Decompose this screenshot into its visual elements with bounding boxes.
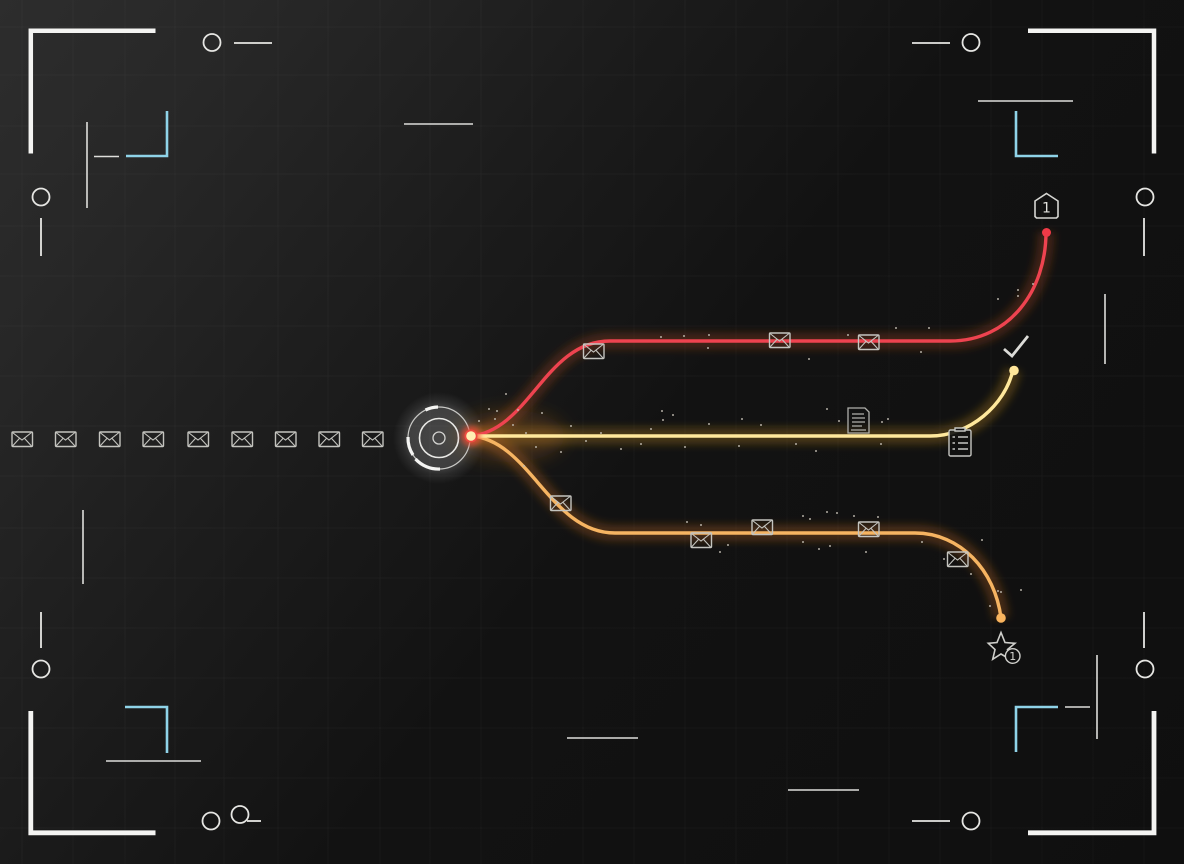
envelope 3 xyxy=(100,432,120,446)
marker: circle and tick top right xyxy=(912,34,980,51)
route: orange branch to bottom xyxy=(471,436,1001,618)
envelope 5 xyxy=(188,432,208,446)
envelope 6 xyxy=(232,432,252,446)
marker: circle and tick bottom right xyxy=(912,812,980,830)
marker: circle and tick top left xyxy=(204,34,272,51)
envelope xyxy=(948,552,968,566)
red route envelopes xyxy=(584,333,879,358)
marker: circle and tick right lower xyxy=(1136,612,1154,678)
marker: circle bottom left xyxy=(202,812,220,830)
route: yellow branch to middle xyxy=(471,370,1013,436)
envelope xyxy=(584,344,604,358)
inner cyan bracket: top left xyxy=(126,111,167,156)
envelope xyxy=(752,520,772,534)
envelope 7 xyxy=(276,432,296,446)
end node: red xyxy=(1042,228,1051,237)
orange route envelopes xyxy=(550,496,968,566)
icon: star with numbered badge: 1 xyxy=(1009,650,1016,663)
icon: document on yellow route xyxy=(848,408,869,433)
envelope 1 xyxy=(12,432,32,446)
envelope 4 xyxy=(143,432,164,446)
router hub xyxy=(393,392,485,484)
icon: star with numbered badge xyxy=(988,632,1020,663)
inner cyan bracket: bottom left xyxy=(125,707,167,753)
end node: yellow xyxy=(1009,366,1019,375)
corner bracket: top right xyxy=(1028,31,1154,153)
route glow xyxy=(471,232,1046,618)
hub output node xyxy=(461,426,481,446)
marker: circle and tick left lower xyxy=(32,612,50,678)
icon: numbered hexagon badge xyxy=(1035,194,1058,218)
corner bracket: bottom left xyxy=(31,711,155,833)
envelope xyxy=(858,522,879,536)
marker: circle and tick left upper xyxy=(32,188,50,256)
envelope xyxy=(691,533,712,548)
envelope 9 xyxy=(362,432,383,446)
floating accent lines xyxy=(83,101,1105,790)
corner bracket: bottom right xyxy=(1028,711,1154,833)
envelope xyxy=(770,333,790,348)
incoming message queue xyxy=(12,432,383,446)
envelope xyxy=(858,335,879,350)
icon: checklist clipboard on yellow route xyxy=(949,428,971,456)
envelope xyxy=(550,496,571,510)
marker: circle and tick bottom left xyxy=(232,806,261,823)
inner cyan bracket: bottom right xyxy=(1016,707,1058,752)
corner bracket: top left xyxy=(31,31,155,153)
route: red branch to top xyxy=(471,232,1046,436)
icon: numbered hexagon badge: 1 xyxy=(1042,200,1051,216)
envelope 2 xyxy=(56,432,76,446)
icon: check mark xyxy=(1004,336,1028,356)
hub haze xyxy=(455,410,565,462)
particle dust xyxy=(478,283,1034,607)
marker: circle and tick right upper xyxy=(1136,188,1154,256)
inner cyan bracket: top right xyxy=(1016,111,1058,156)
end node: orange xyxy=(996,613,1006,623)
envelope 8 xyxy=(319,432,340,446)
